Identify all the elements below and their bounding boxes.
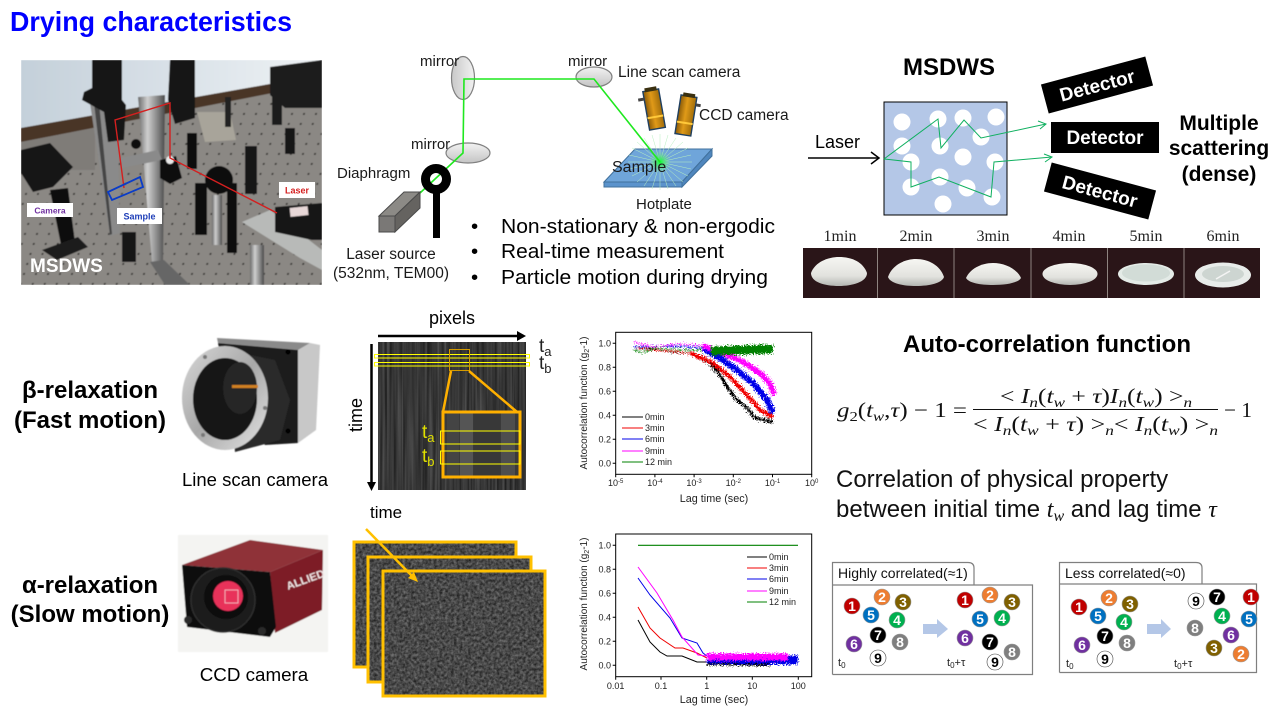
mirror labels: mirror xyxy=(568,53,607,70)
camera labels: CCD camera xyxy=(699,107,789,124)
time labels: 0 xyxy=(1069,662,1074,671)
photo caption: MSDWS xyxy=(30,256,103,277)
mirror top right xyxy=(576,67,612,87)
formula: < I xyxy=(1000,384,1028,408)
particles at t0 plus tau: 5 xyxy=(1245,611,1253,627)
ticks xyxy=(613,545,798,680)
speckle frame stack xyxy=(354,503,545,696)
detector bottom xyxy=(1044,163,1156,219)
correlation description: and lag time xyxy=(1064,496,1208,523)
laser source label: Laser source xyxy=(346,246,436,263)
formula: w xyxy=(1168,424,1180,439)
x tick labels: 0.01 xyxy=(607,681,624,691)
formula: − 1 xyxy=(1224,398,1252,422)
formula: τ) − 1 = xyxy=(890,398,956,422)
legend: 9min xyxy=(769,586,789,596)
formula: w xyxy=(1054,396,1066,411)
sample label xyxy=(117,208,162,224)
x tick labels: 10 xyxy=(765,478,775,488)
row label: alpha relaxation: α-relaxation xyxy=(22,572,158,599)
legend: 3min xyxy=(645,423,665,433)
particles at t0: 3 xyxy=(899,594,907,610)
chart: beta relaxation autocorrelation xyxy=(579,332,819,505)
time labels: 2min xyxy=(900,228,932,245)
correlation description xyxy=(836,466,1218,525)
bullet list xyxy=(471,215,775,289)
formula: n xyxy=(1118,396,1127,411)
particles at t0: 1 xyxy=(1075,599,1083,615)
frame with tab xyxy=(1060,562,1256,672)
bullet list: • xyxy=(471,240,478,263)
time labels: 4min xyxy=(1053,228,1085,245)
bullet list: • xyxy=(471,215,478,238)
x tick labels: -3 xyxy=(696,479,702,485)
zoom connector xyxy=(443,371,517,412)
laser beam xyxy=(420,79,660,193)
sample and hotplate labels: Sample xyxy=(612,159,666,176)
correlation description: τ xyxy=(1208,497,1218,523)
time labels: +τ xyxy=(955,657,966,669)
formula: t xyxy=(866,398,872,422)
particles at t0: 5 xyxy=(867,607,875,623)
correlation description: w xyxy=(1053,508,1064,525)
caption: CCD camera: CCD camera xyxy=(200,664,309,685)
legend xyxy=(747,552,796,607)
formula: n xyxy=(1144,424,1152,439)
inset ta tb labels: b xyxy=(427,454,435,469)
detector top xyxy=(1041,57,1153,113)
formula: < xyxy=(1114,412,1135,436)
x tick labels: -2 xyxy=(736,479,742,485)
time labels xyxy=(824,228,1239,245)
legend: 6min xyxy=(645,434,665,444)
particles at t0: 2 xyxy=(1105,590,1113,606)
particles at t0: 8 xyxy=(896,634,904,650)
detector bottom: Detector xyxy=(1060,172,1140,213)
x axis title: Lag time (sec) xyxy=(680,694,748,706)
time labels: 3min xyxy=(977,228,1009,245)
drying drop series xyxy=(803,228,1260,298)
y tick labels xyxy=(598,338,611,468)
time labels: +τ xyxy=(1182,658,1193,670)
bullet list: Particle motion during drying xyxy=(501,266,768,289)
formula: n xyxy=(1105,424,1114,439)
time label: time xyxy=(370,503,402,522)
formula: t xyxy=(1020,412,1026,436)
optical path overlay xyxy=(115,103,277,213)
x tick labels xyxy=(607,681,806,691)
formula: τ)I xyxy=(1092,384,1117,408)
detector top: Detector xyxy=(1057,66,1138,107)
camera label: Camera xyxy=(34,206,66,216)
formula: I xyxy=(1135,412,1142,436)
camera labels: Line scan camera xyxy=(618,64,741,81)
particles at t0 plus tau: 4 xyxy=(998,610,1006,626)
legend: 9min xyxy=(645,446,665,456)
laser label: Laser xyxy=(285,186,309,196)
transition arrow xyxy=(1147,619,1171,638)
multiple scattering label: Multiple xyxy=(1179,112,1259,135)
zoomed inset xyxy=(443,412,520,477)
panel heading: Less correlated(≈0) xyxy=(1065,565,1186,581)
diaphragm xyxy=(426,168,446,238)
particles at t0 plus tau: 6 xyxy=(1227,627,1235,643)
particles at t0 plus tau: 9 xyxy=(1192,593,1200,609)
x tick labels: 10 xyxy=(726,478,736,488)
noisy tails xyxy=(707,657,798,664)
y tick labels: 0.6 xyxy=(598,386,611,396)
panel: less correlated xyxy=(1060,562,1259,672)
y axis title: 2 xyxy=(584,349,591,353)
streak image xyxy=(378,342,526,490)
heading: MSDWS xyxy=(903,54,995,81)
time label: time xyxy=(346,398,366,432)
formula: w xyxy=(1143,396,1155,411)
sample and hotplate labels: Hotplate xyxy=(636,196,692,213)
formula: g xyxy=(837,398,848,422)
formula: n xyxy=(1029,396,1038,411)
formula: + xyxy=(1039,412,1066,436)
x tick labels xyxy=(608,478,819,488)
formula: , xyxy=(884,398,890,422)
inset ta tb labels xyxy=(422,422,435,469)
formula: w xyxy=(873,410,885,425)
scatter burst xyxy=(628,134,692,190)
formula: ( xyxy=(1127,384,1136,408)
x tick labels: 10 xyxy=(747,681,757,691)
detector middle xyxy=(1051,122,1159,153)
mirror top left xyxy=(452,56,474,100)
particles at t0 plus tau: 9 xyxy=(991,654,999,670)
panel heading: Highly correlated(≈1) xyxy=(838,565,968,581)
laser label: Laser xyxy=(815,132,860,152)
multiple scattering label: scattering xyxy=(1169,137,1269,160)
particles at t0 plus tau xyxy=(1187,589,1259,662)
time labels: t xyxy=(947,657,950,669)
icon: CCD camera lens xyxy=(675,92,702,137)
x tick labels: -5 xyxy=(618,479,624,485)
particles at t0 xyxy=(1071,590,1138,667)
selection square xyxy=(450,350,470,370)
x tick labels: 10 xyxy=(647,478,657,488)
particles at t0: 5 xyxy=(1094,608,1102,624)
formula xyxy=(837,384,1252,439)
particles at t0 plus tau: 3 xyxy=(1210,640,1218,656)
mirror labels xyxy=(411,53,607,153)
particles at t0 plus tau: 2 xyxy=(1237,646,1245,662)
ta tb labels: t xyxy=(539,336,544,357)
formula: w xyxy=(1027,424,1040,439)
ta tb labels: a xyxy=(544,344,552,359)
particles at t0: 2 xyxy=(878,589,886,605)
ta tb labels: t xyxy=(539,353,544,374)
panel: highly correlated xyxy=(832,562,1032,674)
y tick labels: 1.0 xyxy=(598,338,611,348)
legend: 6min xyxy=(769,574,789,584)
legend: 3min xyxy=(769,563,789,573)
icon: line scan camera lens xyxy=(636,86,665,131)
y tick labels: 0.8 xyxy=(598,564,611,574)
y tick labels: 0.4 xyxy=(598,410,611,420)
y axis title: -1) xyxy=(579,538,590,550)
x tick labels: -4 xyxy=(657,479,663,485)
formula: t xyxy=(1046,384,1052,408)
particles at t0 plus tau: 7 xyxy=(1213,589,1221,605)
formula: t xyxy=(1136,384,1141,408)
legend xyxy=(622,412,672,467)
time labels: t xyxy=(1066,658,1069,670)
formula: ( xyxy=(858,398,866,422)
legend: 0min xyxy=(645,412,665,422)
x tick labels: 10 xyxy=(608,478,618,488)
particles at t0 plus tau: 4 xyxy=(1218,608,1226,624)
time labels: t xyxy=(1174,658,1177,670)
inset line markers xyxy=(440,431,520,464)
laser label xyxy=(279,182,315,198)
sample square with particles xyxy=(884,102,1007,215)
y tick labels xyxy=(598,540,611,670)
y tick labels: 0.4 xyxy=(598,612,611,622)
formula: n xyxy=(1003,424,1011,439)
mirror lower xyxy=(446,143,490,163)
y tick labels: 0.2 xyxy=(598,434,611,444)
time labels: t xyxy=(838,657,841,669)
particles at t0: 4 xyxy=(893,612,901,628)
diagram: MSDWS scattering xyxy=(808,54,1269,219)
icon: CCD camera: ALLIED xyxy=(285,568,326,593)
y tick labels: 0.8 xyxy=(598,362,611,372)
particles at t0: 6 xyxy=(850,636,858,652)
formula: + xyxy=(1065,384,1092,408)
panel: lab setup photo xyxy=(21,60,322,285)
legend: 12 min xyxy=(769,597,796,607)
bullet list: Real-time measurement xyxy=(501,240,724,263)
bullet list: • xyxy=(471,266,478,289)
legend: 12 min xyxy=(645,457,672,467)
y tick labels: 0.2 xyxy=(598,636,611,646)
x tick labels: 10 xyxy=(686,478,696,488)
frame with tab xyxy=(832,562,1032,674)
y axis title: Autocorrelation function (g xyxy=(579,353,590,469)
formula: ( xyxy=(1011,412,1020,436)
x tick labels: 0 xyxy=(815,479,819,485)
particles at t0 plus tau: 8 xyxy=(1008,644,1016,660)
chart: alpha relaxation autocorrelation xyxy=(579,534,812,706)
y axis title: 2 xyxy=(584,550,591,554)
time labels xyxy=(838,657,966,670)
transition arrow xyxy=(923,619,948,638)
correlation description: between initial time t xyxy=(836,496,1053,523)
particles at t0 plus tau: 8 xyxy=(1191,620,1199,636)
frame middle xyxy=(368,557,531,682)
x tick labels: 1 xyxy=(704,681,709,691)
drop photo strip xyxy=(803,248,1260,298)
formula: n xyxy=(1209,424,1218,439)
bullet list: Non-stationary & non-ergodic xyxy=(501,215,775,238)
y tick labels: 1.0 xyxy=(598,540,611,550)
particles at t0 plus tau: 7 xyxy=(986,634,994,650)
particles at t0 xyxy=(844,589,911,666)
formula: < I xyxy=(973,412,1001,436)
particles at t0 plus tau: 6 xyxy=(961,630,969,646)
time labels: 0 xyxy=(1177,662,1182,671)
formula: τ) > xyxy=(1066,412,1100,436)
particles at t0: 1 xyxy=(848,598,856,614)
x tick labels: 100 xyxy=(791,681,806,691)
x tick labels: 10 xyxy=(805,478,815,488)
particles at t0: 8 xyxy=(1123,635,1131,651)
time arrow xyxy=(367,344,376,491)
curves xyxy=(634,342,774,422)
particles at t0: 7 xyxy=(874,627,882,643)
particles at t0: 7 xyxy=(1101,628,1109,644)
particles at t0: 6 xyxy=(1078,637,1086,653)
ticks xyxy=(613,343,812,477)
mirror labels: mirror xyxy=(411,136,450,153)
detector middle: Detector xyxy=(1066,128,1144,149)
heading: auto-correlation function: Auto-correlation function xyxy=(903,331,1191,358)
particles at t0 plus tau: 1 xyxy=(961,592,969,608)
formula: t xyxy=(1161,412,1167,436)
particles at t0 plus tau: 3 xyxy=(1008,594,1016,610)
line markers xyxy=(374,354,530,366)
particles at t0 plus tau: 5 xyxy=(976,611,984,627)
correlation description: Correlation of physical property xyxy=(836,466,1168,493)
lower scattering path xyxy=(884,154,1052,197)
x tick labels: -1 xyxy=(775,479,781,485)
ta tb labels xyxy=(539,336,552,376)
pixels label: pixels xyxy=(429,308,475,328)
time labels xyxy=(1066,658,1193,671)
particles at t0: 9 xyxy=(1101,651,1109,667)
particles at t0: 9 xyxy=(874,650,882,666)
ta tb labels: b xyxy=(544,361,552,376)
sample label: Sample xyxy=(123,212,156,222)
thin curves xyxy=(638,545,798,662)
particles at t0: 3 xyxy=(1126,596,1134,612)
y axis title: -1) xyxy=(579,337,590,349)
laser source box xyxy=(379,192,420,232)
row label: beta relaxation: (Fast motion) xyxy=(14,407,166,434)
x axis title: Lag time (sec) xyxy=(680,493,748,505)
camera label xyxy=(27,203,73,217)
formula: ) > xyxy=(1180,412,1209,436)
hotplate xyxy=(604,149,712,187)
formula: n xyxy=(1183,396,1192,411)
time labels: 0 xyxy=(950,661,955,670)
frame front xyxy=(383,571,545,696)
row label: alpha relaxation: (Slow motion) xyxy=(11,601,169,628)
row label: beta relaxation: β-relaxation xyxy=(22,377,158,404)
formula: ( xyxy=(1038,384,1046,408)
mirror labels: mirror xyxy=(420,53,459,70)
formula: ) > xyxy=(1154,384,1183,408)
time labels: 0 xyxy=(841,661,846,670)
particles at t0 plus tau xyxy=(957,587,1020,670)
y tick labels: 0.0 xyxy=(598,458,611,468)
laser source label: (532nm, TEM00) xyxy=(333,265,449,282)
diaphragm label: Diaphragm xyxy=(337,165,410,182)
particles at t0 plus tau: 2 xyxy=(986,587,994,603)
sample marker xyxy=(108,177,143,200)
inset ta tb labels: t xyxy=(422,422,427,443)
time labels: 1min xyxy=(824,228,856,245)
frame back xyxy=(354,542,516,667)
inset ta tb labels: a xyxy=(427,430,435,445)
icon: CCD camera xyxy=(178,535,328,652)
caption: line scan camera: Line scan camera xyxy=(182,469,329,490)
time labels: 5min xyxy=(1130,228,1162,245)
time labels: 6min xyxy=(1207,228,1239,245)
axes frame xyxy=(616,332,812,474)
arrow xyxy=(366,529,418,582)
sample and hotplate labels xyxy=(612,159,692,213)
axes frame xyxy=(616,534,812,677)
legend: 0min xyxy=(769,552,789,562)
particles at t0 plus tau: 1 xyxy=(1247,589,1255,605)
laser arrow xyxy=(808,152,879,164)
y tick labels: 0.6 xyxy=(598,588,611,598)
multiple scattering label: (dense) xyxy=(1182,163,1256,186)
pixels arrow xyxy=(378,331,526,341)
formula: 2 xyxy=(849,410,858,425)
y tick labels: 0.0 xyxy=(598,660,611,670)
camera labels xyxy=(618,64,789,124)
x tick labels: 0.1 xyxy=(655,681,667,691)
line scan image xyxy=(346,308,552,491)
formula: ( xyxy=(1152,412,1161,436)
diagram: optical layout xyxy=(333,53,789,282)
y axis title: Autocorrelation function (g xyxy=(579,554,590,670)
upper scattering path xyxy=(884,119,1046,159)
icon: line scan camera xyxy=(182,338,320,452)
inset ta tb labels: t xyxy=(422,446,427,467)
title: Drying characteristics xyxy=(10,6,292,37)
particles at t0: 4 xyxy=(1120,614,1128,630)
